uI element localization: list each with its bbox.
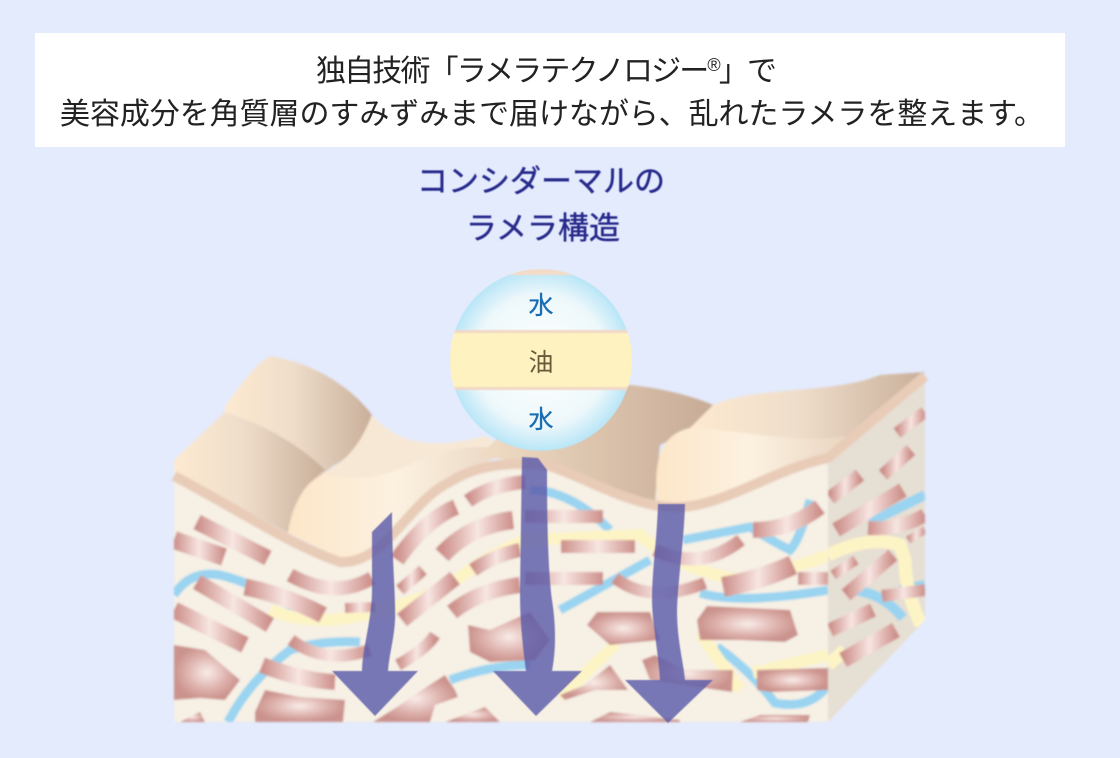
title line 2: 美容成分を角質層のすみずみまで届けながら、乱れたラメラを整えます。 (60, 98, 1044, 131)
skin cross-section diagram (174, 356, 928, 725)
title panel (35, 33, 1065, 147)
front yellow lipid lines (270, 535, 828, 697)
heading: lamella structure (417, 164, 665, 246)
heading: lamella structure: コンシダーマルの (417, 164, 665, 199)
front flat bricks (525, 510, 830, 585)
title line 1: 」で (719, 55, 777, 88)
label: water bottom: 水 (528, 406, 554, 434)
front face (174, 450, 830, 725)
label: water top: 水 (528, 292, 554, 320)
front blue lipid lines (174, 490, 828, 722)
skin top surface folds (174, 356, 925, 559)
side yellow lipid lines (828, 542, 921, 665)
title line 1: ® (707, 55, 721, 75)
title line 1: 独自技術「ラメラテクノロジー (316, 55, 709, 88)
side blue lipid lines (847, 495, 925, 618)
side bricks (830, 412, 925, 660)
arrow: left (332, 512, 418, 716)
front corneocyte blobs (174, 606, 828, 722)
label: oil: 油 (528, 349, 554, 377)
side face (828, 370, 928, 725)
magnified lamella circle (450, 269, 632, 451)
arrow: centre (493, 457, 582, 716)
skin edge band (174, 376, 925, 562)
arrows (332, 457, 713, 723)
arrow: right (625, 504, 713, 723)
front curved bricks (174, 482, 820, 682)
heading: lamella structure: ラメラ構造 (466, 211, 620, 246)
